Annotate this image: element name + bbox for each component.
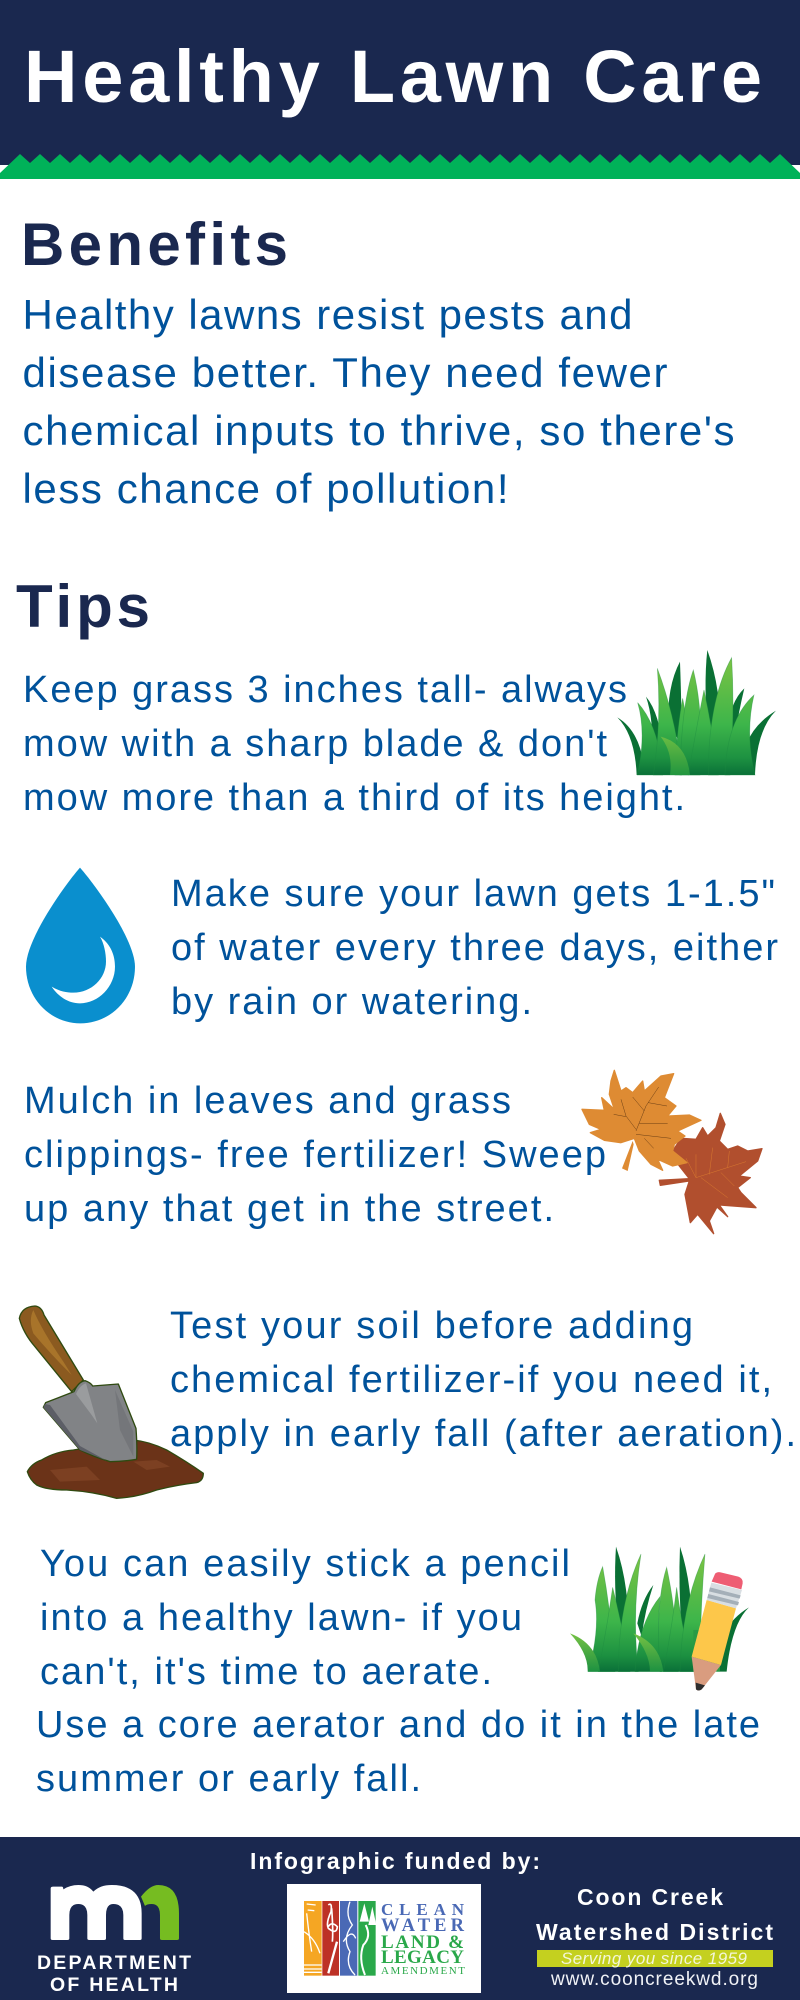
text block: benefits bbox=[22, 291, 734, 512]
icon: water drop bbox=[26, 868, 135, 1023]
title: Healthy Lawn Care bbox=[24, 35, 762, 118]
text block: benefits: less chance of pollution! bbox=[22, 465, 508, 512]
text block: benefits: Healthy lawns resist pests and bbox=[22, 291, 632, 338]
Coon Creek Watershed District block bbox=[536, 1884, 773, 1990]
soil mound bbox=[27, 1440, 203, 1498]
tip 4 text: apply in early fall (after aeration). bbox=[170, 1413, 796, 1455]
Coon Creek Watershed District block: Serving you since 1959 bbox=[561, 1949, 748, 1968]
text block: benefits: disease better. They need fewer bbox=[22, 349, 668, 396]
text block: benefits: chemical inputs to thrive, so there's bbox=[22, 407, 734, 454]
icon: shovel in soil bbox=[19, 1306, 203, 1498]
tip 2 text bbox=[171, 873, 778, 1023]
icon: autumn leaves bbox=[582, 1070, 762, 1234]
logo: Minnesota Department of Health: OF HEALTH bbox=[50, 1974, 178, 1996]
Coon Creek Watershed District block: www.cooncreekwd.org bbox=[550, 1969, 758, 1990]
shovel blade bbox=[43, 1381, 137, 1462]
heading: Tips: Tips bbox=[16, 573, 150, 640]
icon: grass bbox=[617, 650, 776, 775]
tip 5 text: can't, it's time to aerate. bbox=[40, 1651, 492, 1693]
tip 1 text: Keep grass 3 inches tall- always bbox=[23, 669, 627, 711]
logo: Clean Water Land & Legacy Amendment: CLEAN bbox=[381, 1900, 465, 1919]
grass bbox=[570, 1547, 749, 1672]
logo: Minnesota Department of Health: DEPARTMENT bbox=[37, 1952, 191, 1974]
logo: Clean Water Land & Legacy Amendment: LEGACY bbox=[381, 1947, 464, 1968]
tip 1 text: mow with a sharp blade & don't bbox=[23, 723, 607, 765]
tip 4 text bbox=[170, 1305, 796, 1455]
orange leaf bbox=[582, 1070, 701, 1171]
tip 4 text: Test your soil before adding bbox=[170, 1305, 693, 1347]
grass zigzag edge bbox=[0, 154, 800, 179]
tip 2 text: Make sure your lawn gets 1-1.5" bbox=[171, 873, 775, 915]
logo: Minnesota Department of Health bbox=[37, 1885, 191, 1996]
heading: Benefits: Benefits bbox=[21, 211, 288, 278]
logo: Clean Water Land & Legacy Amendment: WATER bbox=[381, 1916, 465, 1936]
tip 1 text bbox=[23, 669, 685, 819]
logo: Clean Water Land & Legacy Amendment: AMENDMENT bbox=[381, 1965, 465, 1977]
tip 5 text: You can easily stick a pencil bbox=[40, 1543, 570, 1585]
tip 3 text: clippings- free fertilizer! Sweep bbox=[24, 1134, 606, 1176]
tip 3 text: Mulch in leaves and grass bbox=[24, 1080, 511, 1122]
tip 5 text: into a healthy lawn- if you bbox=[40, 1597, 522, 1639]
logo: Clean Water Land & Legacy Amendment bbox=[287, 1884, 481, 1993]
Coon Creek Watershed District block: Coon Creek bbox=[577, 1884, 723, 1910]
tip 1 text: mow more than a third of its height. bbox=[23, 777, 685, 819]
tip 5 text bbox=[36, 1543, 760, 1800]
tip 5 text: summer or early fall. bbox=[36, 1758, 421, 1800]
pencil bbox=[692, 1572, 743, 1690]
red leaf bbox=[659, 1113, 762, 1234]
Coon Creek Watershed District block: Watershed District bbox=[536, 1919, 773, 1945]
icon: grass and pencil bbox=[570, 1547, 749, 1690]
tip 3 text: up any that get in the street. bbox=[24, 1188, 554, 1230]
logo: Clean Water Land & Legacy Amendment: LAND & bbox=[381, 1932, 464, 1953]
shovel handle bbox=[19, 1306, 83, 1392]
footer heading: Infographic funded by: bbox=[250, 1848, 540, 1874]
tip 2 text: by rain or watering. bbox=[171, 981, 532, 1023]
footer band bbox=[0, 1837, 800, 2000]
header banner bbox=[0, 0, 800, 179]
tip 5 text: Use a core aerator and do it in the late bbox=[36, 1704, 760, 1746]
tip 3 text bbox=[24, 1080, 606, 1230]
tip 2 text: of water every three days, either bbox=[171, 927, 778, 969]
tip 4 text: chemical fertilizer-if you need it, bbox=[170, 1359, 772, 1401]
